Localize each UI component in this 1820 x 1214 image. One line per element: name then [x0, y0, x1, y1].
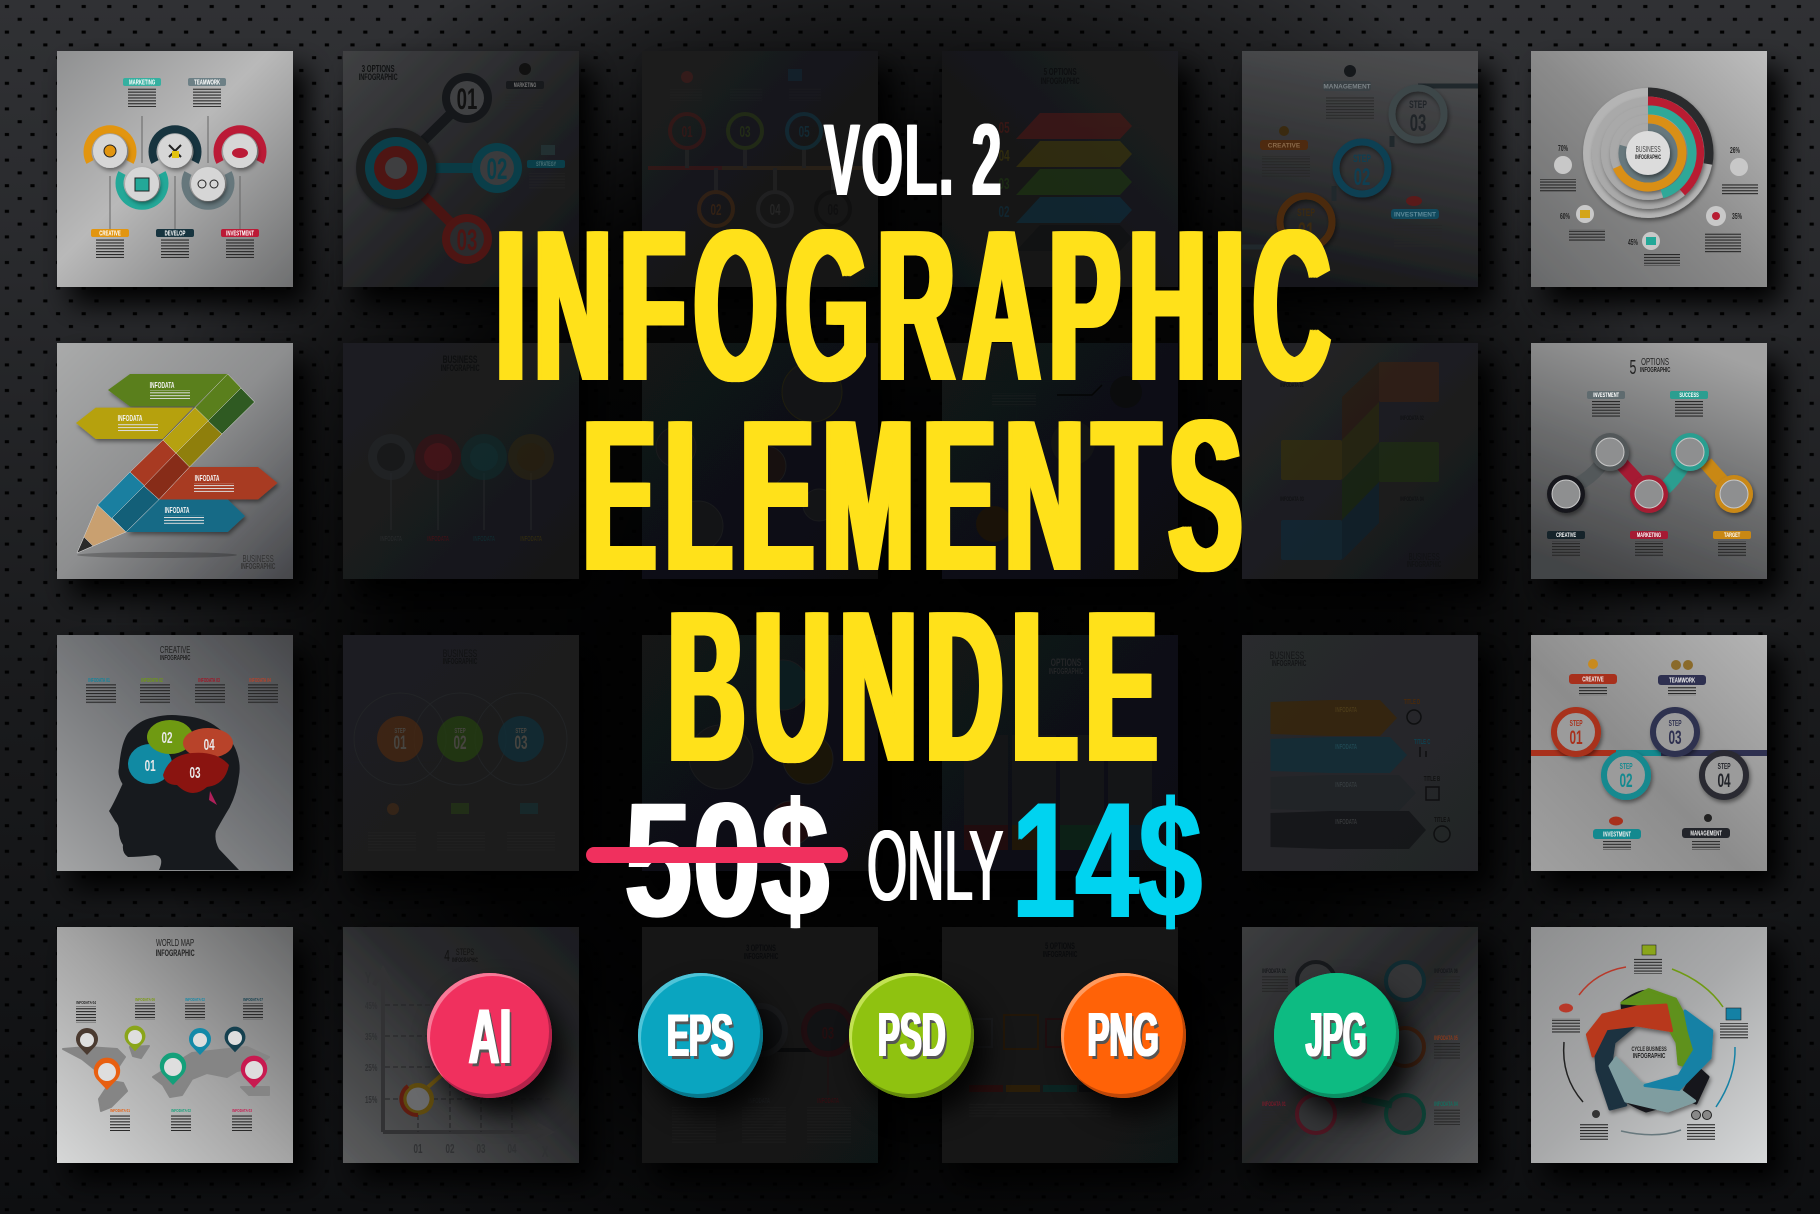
heading: OPTIONS	[1051, 656, 1081, 668]
heading: INFOGRAPHIC	[744, 953, 779, 961]
step rings	[1280, 88, 1444, 248]
folded boxes	[1281, 362, 1439, 560]
heading	[1043, 941, 1078, 959]
numbered nodes	[442, 73, 522, 264]
rings	[368, 434, 554, 480]
concentric rings	[1583, 88, 1713, 218]
labels	[380, 536, 543, 543]
framed boxes	[962, 1015, 1076, 1049]
panel: step line thumbnail	[1531, 635, 1767, 871]
percent stats: 45%	[1628, 239, 1638, 247]
chart node	[401, 1065, 453, 1115]
side labels: MARKETING	[514, 82, 536, 89]
panel: creative brain thumbnail	[57, 635, 293, 871]
arrow labels	[1335, 699, 1451, 826]
centre hub: BUSINESS	[1636, 146, 1661, 154]
brain lobes: 01	[145, 757, 156, 775]
percent stats: 60%	[1560, 213, 1570, 221]
pills and copy: CREATIVE	[1268, 142, 1301, 150]
numbered nodes: 02	[487, 153, 507, 186]
heading	[156, 936, 195, 958]
heading: INFOGRAPHIC	[1272, 660, 1307, 668]
step labels: STEP	[1570, 720, 1583, 728]
step labels: 02	[1354, 165, 1370, 191]
step numbers: 01	[393, 733, 407, 754]
step labels: STEP	[1297, 206, 1315, 218]
arrow labels: TITLE B	[1424, 776, 1440, 783]
chart labels: 45%	[365, 999, 378, 1011]
step numbers: 02	[453, 733, 467, 754]
world map	[63, 1046, 269, 1111]
stat icons and copy	[1540, 156, 1758, 266]
panel: world map steps thumbnail, dimmed	[343, 343, 579, 579]
arrow labels: INFODATA	[1335, 819, 1358, 826]
badge: PNG format: PNG	[1088, 1000, 1159, 1070]
step labels	[1569, 720, 1731, 792]
timeline numbers: 06	[827, 201, 839, 219]
heading: 5 OPTIONS	[1045, 941, 1075, 951]
heading: INFOGRAPHIC	[452, 957, 478, 964]
badge: EPS format: EPS	[667, 1002, 734, 1068]
panel: 3 options node thumbnail	[343, 51, 579, 287]
badge: EPS format	[638, 973, 763, 1098]
info columns: INFODATA 01	[88, 677, 110, 683]
heading: INFOGRAPHIC	[441, 363, 480, 373]
step numbers: STEP	[515, 728, 527, 735]
labels and copy: CREATIVE	[99, 231, 121, 238]
centre title	[1631, 1046, 1667, 1060]
step numbers: 03	[514, 733, 528, 754]
brain lobes	[128, 720, 233, 805]
heading: volume: VOL. 2	[824, 103, 1003, 217]
step numbers: STEP	[454, 728, 466, 735]
step labels: 01	[1298, 219, 1314, 245]
heading: CREATIVE	[160, 643, 191, 655]
pills: SUCCESS	[1679, 392, 1699, 399]
arrow labels: INFODATA	[1335, 782, 1358, 789]
side labels: INFODATA 04	[1400, 496, 1424, 503]
side labels: INFODATA 03	[1280, 496, 1304, 503]
heading: INFOGRAPHIC	[359, 72, 398, 82]
step rings	[1554, 710, 1746, 797]
step label: 03	[822, 1023, 834, 1044]
heading: 4	[444, 947, 450, 965]
badge: AI format	[427, 973, 552, 1098]
step labels: STEP	[1718, 763, 1731, 771]
timeline rings	[648, 114, 868, 226]
timeline numbers: 01	[682, 123, 693, 141]
side labels: INFODATA 02	[1400, 415, 1424, 422]
panel: world map pins thumbnail	[57, 927, 293, 1163]
arrow labels: TITLE A	[1434, 817, 1451, 824]
ring chain	[88, 116, 262, 235]
panel: columns thumbnail, dimmed	[942, 635, 1178, 871]
wave connectors	[1566, 452, 1734, 494]
numbered nodes: 01	[457, 83, 477, 116]
heading: 3 OPTIONS	[362, 62, 395, 74]
step labels: STEP	[1669, 720, 1682, 728]
side labels: INFOGRAPHIC	[1407, 561, 1442, 569]
rings	[689, 660, 833, 845]
heading	[744, 943, 779, 961]
chart labels: Y	[365, 969, 371, 987]
pills and copy: INVESTMENT	[1394, 212, 1436, 218]
banner titles: INFODATA	[118, 415, 143, 423]
centre hub: INFOGRAPHIC	[1635, 154, 1661, 161]
copy and icons	[1579, 659, 1720, 850]
step discs	[354, 693, 567, 785]
node labels and copy: INFODATA 02	[1262, 968, 1286, 975]
labels: INFODATA	[380, 536, 403, 543]
icons	[1279, 65, 1422, 206]
brand: BUSINESS	[242, 552, 274, 564]
new price: 14$	[1012, 768, 1202, 952]
icons	[1407, 710, 1450, 842]
arrow labels: TITLE D	[1404, 699, 1420, 706]
stacked arrows	[1016, 113, 1132, 251]
panel: circle cluster thumbnail, dimmed	[642, 343, 878, 579]
banner titles: INFODATA	[165, 507, 190, 515]
centre title: CYCLE BUSINESS	[1631, 1046, 1667, 1053]
pencil tip shadow	[77, 552, 237, 558]
node labels and copy: INFODATA 05	[1434, 1035, 1458, 1042]
heading: OPTIONS	[1641, 355, 1669, 367]
panel: node link thumbnail, dimmed	[942, 343, 1178, 579]
main hub	[356, 128, 436, 208]
heading: INFOGRAPHIC	[443, 658, 478, 666]
panel: marketing five-ring thumbnail	[57, 51, 293, 287]
heading: BUSINESS	[1270, 649, 1304, 661]
title line: bundle: BUNDLE	[668, 565, 1166, 807]
pills: INVESTMENT	[1593, 392, 1620, 399]
connector line	[1242, 86, 1478, 247]
arrows	[1270, 700, 1426, 849]
heading	[443, 647, 478, 666]
node labels and copy: INFODATA 04	[1434, 1101, 1458, 1108]
pills: TEAMWORK	[1669, 678, 1696, 685]
badge: PSD format: PSD	[878, 1000, 945, 1070]
arrow numbers: 03	[998, 175, 1010, 193]
panel: 5 options process thumbnail, dimmed	[942, 927, 1178, 1163]
side labels: INFODATA 01	[1280, 382, 1304, 389]
heading	[1041, 65, 1080, 86]
pills: MARKETING	[1637, 532, 1661, 539]
heading: INFOGRAPHIC	[160, 655, 191, 662]
pills and copy	[1260, 81, 1442, 247]
cycle icons and copy	[1552, 945, 1748, 1140]
only label: ONLY	[867, 810, 1003, 922]
copy	[1552, 401, 1746, 557]
heading: STEPS	[456, 947, 474, 957]
heading	[160, 643, 191, 662]
cycle arrows	[1564, 967, 1735, 1135]
panel: cycle ribbons thumbnail	[1531, 927, 1767, 1163]
heading: INFOGRAPHIC	[1041, 76, 1080, 86]
chart labels: 03	[477, 1142, 485, 1157]
pills	[969, 1085, 1113, 1118]
stems	[391, 473, 531, 530]
arrow banners	[76, 374, 278, 532]
connector	[1362, 1099, 1392, 1105]
pills: INVESTMENT	[1603, 832, 1631, 839]
info columns	[86, 677, 278, 704]
panel: timeline thumbnail, dimmed	[642, 51, 878, 287]
brand: INFOGRAPHIC	[241, 563, 276, 571]
heading	[444, 947, 478, 965]
old price: 50$	[624, 768, 829, 951]
percent stats: 35%	[1732, 213, 1742, 221]
step rings	[682, 1048, 832, 1052]
pills	[1547, 391, 1751, 539]
brain lobes: 03	[189, 764, 201, 782]
step numbers: STEP	[394, 728, 406, 735]
strike through	[586, 847, 848, 863]
heading	[441, 353, 480, 373]
arrow numbers: 02	[998, 203, 1010, 221]
upper copy	[670, 69, 821, 101]
pills: CREATIVE	[1582, 677, 1604, 684]
timeline numbers: 04	[770, 201, 781, 219]
side labels: STRATEGY	[536, 161, 557, 168]
info columns: INFODATA 03	[198, 677, 220, 683]
panel: radial percent thumbnail	[1531, 51, 1767, 287]
heading	[1270, 649, 1307, 668]
step labels: 03	[1668, 728, 1682, 749]
step labels: STEP	[1409, 98, 1427, 110]
brain lobes: 04	[204, 736, 215, 754]
heading: 3 OPTIONS	[746, 943, 776, 953]
chart labels	[365, 969, 548, 1161]
timeline numbers: 03	[739, 123, 751, 141]
info columns: INFODATA 04	[249, 677, 271, 683]
percent stats: 26%	[1730, 147, 1740, 155]
info labels: INFODATA 04	[76, 999, 96, 1005]
panel: 5 options wave thumbnail	[1531, 343, 1767, 579]
info labels: INFODATA 02	[171, 1107, 191, 1113]
step labels: 03	[1410, 111, 1426, 137]
badge: JPG format: JPG	[1306, 1000, 1367, 1070]
panel: step staircase thumbnail	[1242, 51, 1478, 287]
percent stats	[1558, 145, 1742, 247]
pills: CREATIVE	[1556, 532, 1576, 539]
panel: 4 steps chart thumbnail	[343, 927, 579, 1163]
panel: pencil arrows thumbnail	[57, 343, 293, 579]
woven ribbons	[1587, 990, 1712, 1111]
chart labels: X	[542, 1143, 548, 1161]
pills and copy: MANAGEMENT	[1323, 84, 1371, 90]
panel: overlapping rings thumbnail, dimmed	[642, 635, 878, 871]
chart grid	[385, 1005, 552, 1132]
arrow numbers: 05	[999, 119, 1010, 137]
heading: 5 OPTIONS	[1044, 65, 1077, 77]
columns of copy	[672, 1054, 851, 1143]
nodes	[976, 376, 1142, 542]
labels and copy: INVESTMENT	[226, 231, 254, 238]
heading: BUSINESS	[443, 353, 477, 365]
pencil body	[77, 374, 254, 553]
info labels: INFODATA 07	[243, 996, 263, 1002]
info labels	[76, 996, 263, 1131]
timeline numbers	[682, 123, 839, 219]
step labels: 01	[1569, 728, 1583, 749]
title line: elements: ELEMENTS	[583, 374, 1251, 616]
percent stats: 70%	[1558, 145, 1568, 153]
chart labels: 15%	[365, 1093, 378, 1105]
arrow numbers: 04	[999, 147, 1010, 165]
labels: INFODATA	[520, 536, 543, 543]
panel: three steps thumbnail, dimmed	[343, 635, 579, 871]
brand	[241, 552, 276, 571]
banner titles	[118, 382, 234, 524]
panel: folded ribbon thumbnail, dimmed	[1242, 343, 1478, 579]
step labels: 02	[1619, 771, 1633, 792]
heading: INFOGRAPHIC	[1043, 951, 1078, 959]
side labels	[1280, 382, 1442, 569]
columns of copy: INFODATA	[817, 1098, 840, 1105]
columns	[964, 735, 1152, 850]
arrow labels: INFODATA	[1335, 707, 1358, 714]
panel: 3 options step line thumbnail, dimmed	[642, 927, 878, 1163]
labels and copy: DEVELOP	[165, 231, 185, 238]
node labels and copy: INFODATA 01	[1262, 1101, 1286, 1108]
panel: layered arrows thumbnail, dimmed	[1242, 635, 1478, 871]
arrow labels: TITLE C	[1414, 739, 1431, 746]
chart labels: 01	[414, 1142, 422, 1157]
node labels and copy	[1262, 968, 1460, 1125]
centre title: INFOGRAPHIC	[1633, 1052, 1666, 1060]
heading	[1630, 355, 1671, 379]
ribbon line	[1531, 750, 1767, 756]
heading: BUSINESS	[443, 647, 477, 659]
labels and copy	[91, 78, 259, 258]
nodes	[1297, 962, 1424, 1133]
badge: PSD format	[849, 973, 974, 1098]
heading	[359, 62, 398, 82]
map pins	[76, 1026, 267, 1090]
chart labels: 02	[446, 1142, 454, 1157]
brain lobes: 02	[161, 729, 173, 747]
step numbers	[393, 728, 528, 754]
title line: infographic: INFOGRAPHIC	[496, 184, 1339, 426]
wave nodes	[1547, 433, 1753, 513]
head silhouette	[109, 715, 240, 870]
info labels: INFODATA 02	[185, 996, 205, 1002]
info labels: INFODATA 01	[110, 1107, 130, 1113]
labels and copy: TEAMWORK	[194, 80, 221, 87]
info labels: INFODATA 03	[232, 1107, 252, 1113]
badge: JPG format	[1274, 973, 1399, 1098]
node labels and copy: INFODATA 06	[1434, 968, 1458, 975]
arrow labels: INFODATA	[1335, 744, 1358, 751]
side labels: BUSINESS	[1408, 550, 1440, 562]
heading: 5	[1630, 356, 1636, 379]
pills: TARGET	[1724, 532, 1741, 539]
discs	[656, 362, 842, 551]
step labels: STEP	[1353, 152, 1371, 164]
icons	[104, 145, 248, 191]
heading: WORLD MAP	[156, 936, 195, 948]
chart labels: 35%	[365, 1030, 378, 1042]
chart axes	[374, 969, 551, 1140]
timeline numbers: 02	[710, 201, 722, 219]
panel: 5 options stacked arrows thumbnail, dimmed	[942, 51, 1178, 287]
labels: INFODATA	[473, 536, 496, 543]
connectors	[413, 98, 497, 239]
labels and copy: MARKETING	[129, 80, 156, 87]
panel: six node thumbnail	[1242, 927, 1478, 1163]
numbered nodes: 03	[457, 224, 477, 257]
centre hub	[1626, 131, 1670, 175]
pills	[1569, 674, 1730, 839]
heading: INFOGRAPHIC	[1640, 367, 1671, 374]
banner titles: INFODATA	[195, 475, 220, 483]
badge: PNG format	[1061, 973, 1186, 1098]
chart labels: 25%	[365, 1061, 378, 1073]
arrow numbers	[998, 119, 1010, 221]
labels: INFODATA	[427, 536, 450, 543]
columns of copy: INFODATA	[748, 1098, 771, 1105]
side labels	[505, 63, 565, 189]
badge: AI format: AI	[468, 992, 511, 1080]
timeline numbers: 05	[799, 123, 810, 141]
step labels: STEP	[1620, 763, 1633, 771]
step labels: 04	[1717, 771, 1731, 792]
pills: MANAGEMENT	[1690, 831, 1722, 838]
chart labels: 04	[508, 1142, 516, 1157]
step labels	[1297, 98, 1427, 245]
icons and copy	[368, 803, 555, 851]
info labels: INFODATA 06	[135, 996, 155, 1002]
banner titles: INFODATA	[150, 382, 175, 390]
info columns: INFODATA 02	[141, 677, 163, 683]
heading: INFOGRAPHIC	[1049, 668, 1084, 676]
heading	[1049, 656, 1084, 676]
heading: INFOGRAPHIC	[156, 948, 195, 958]
coloured arcs	[1617, 92, 1709, 194]
